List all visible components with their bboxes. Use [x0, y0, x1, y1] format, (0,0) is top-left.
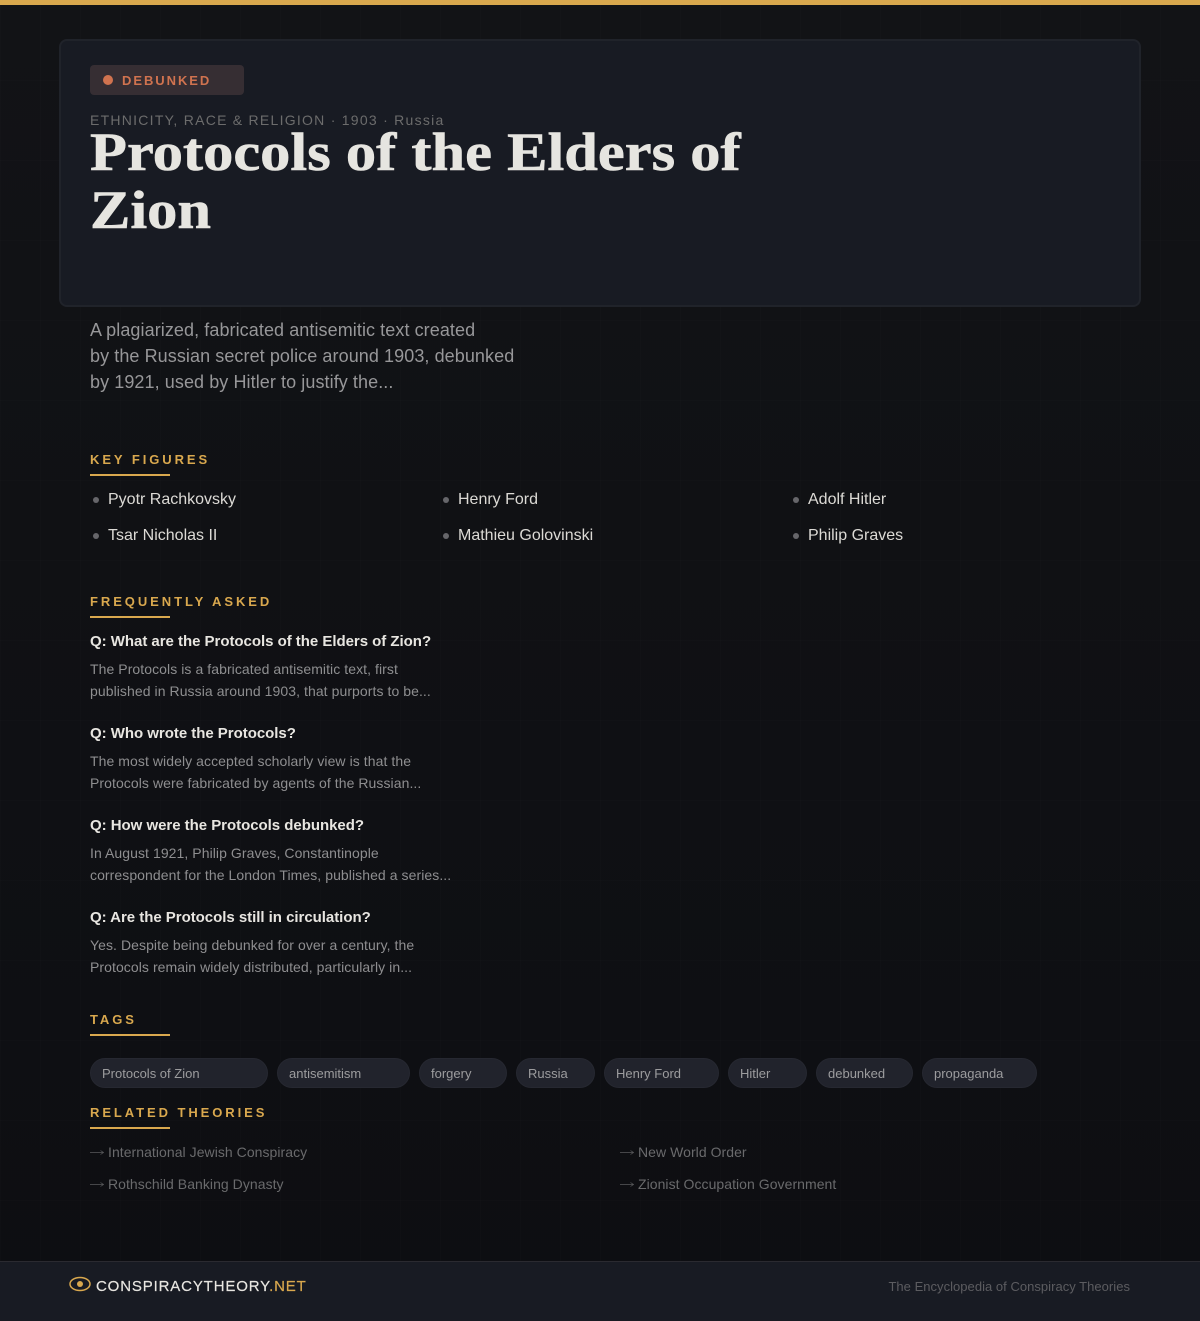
related link: New World Order: [638, 1144, 747, 1160]
figure: Adolf Hitler: [808, 491, 886, 508]
faq answer 1: [90, 661, 431, 699]
tag: debunked: [828, 1066, 885, 1081]
heading: key figures: KEY FIGURES: [90, 452, 210, 467]
tag: forgery: [431, 1066, 471, 1081]
tag: Protocols of Zion: [102, 1066, 200, 1081]
panel: key figures list: [93, 491, 903, 544]
top accent bar: [0, 0, 1200, 5]
tag: antisemitism: [289, 1066, 361, 1081]
figure: Mathieu Golovinski: [458, 527, 593, 544]
related link: Rothschild Banking Dynasty: [108, 1176, 284, 1192]
heading: tags: TAGS: [90, 1012, 137, 1027]
summary text: [90, 320, 514, 392]
faq question 4: Q: Are the Protocols still in circulation?: [90, 909, 371, 926]
title: Protocols of the Elders of: [90, 122, 741, 182]
summary text: A plagiarized, fabricated antisemitic text created: [90, 320, 475, 340]
faq answer 4: Protocols remain widely distributed, particularly in...: [90, 959, 412, 975]
panel: header card: [59, 39, 1141, 307]
faq answer 4: Yes. Despite being debunked for over a century, the: [90, 937, 414, 953]
badge label: DEBUNKED: [122, 73, 211, 88]
faq answer 2: The most widely accepted scholarly view is that the: [90, 753, 411, 769]
faq answer 2: Protocols were fabricated by agents of the Russian...: [90, 775, 421, 791]
title: Zion: [90, 180, 211, 240]
related link: Zionist Occupation Government: [638, 1176, 836, 1192]
tag: Hitler: [740, 1066, 770, 1081]
faq answer 3: In August 1921, Philip Graves, Constantinople: [90, 845, 379, 861]
tag: [728, 1058, 807, 1088]
faq answer 2: [90, 753, 421, 791]
tag: [516, 1058, 595, 1088]
footer bar: [0, 1261, 1200, 1321]
figure: Henry Ford: [458, 491, 538, 508]
logo wordmark: CONSPIRACYTHEORY.NET: [96, 1278, 307, 1295]
tag: [277, 1058, 410, 1088]
faq answer 4: [90, 937, 414, 975]
faq answer 1: The Protocols is a fabricated antisemitic text, first: [90, 661, 398, 677]
heading: frequently asked: FREQUENTLY ASKED: [90, 594, 272, 609]
faq question 2: Q: Who wrote the Protocols?: [90, 725, 296, 742]
tag: [90, 1058, 268, 1088]
footer tagline: The Encyclopedia of Conspiracy Theories: [888, 1279, 1130, 1294]
figure: Philip Graves: [808, 527, 903, 544]
badge dot: [103, 75, 113, 85]
faq question 1: Q: What are the Protocols of the Elders of Zion?: [90, 633, 431, 650]
faq answer 3: correspondent for the London Times, published a series...: [90, 867, 451, 883]
faq answer 3: [90, 845, 451, 883]
status badge: [90, 65, 244, 95]
faq question 3: Q: How were the Protocols debunked?: [90, 817, 364, 834]
tags row: [90, 1058, 1037, 1088]
category line: ETHNICITY, RACE & RELIGION · 1903 · Russia: [90, 112, 445, 128]
tag: Henry Ford: [616, 1066, 681, 1081]
tag: [922, 1058, 1037, 1088]
icon: eye logo: [69, 1276, 91, 1292]
summary text: by 1921, used by Hitler to justify the...: [90, 372, 393, 392]
tag: Russia: [528, 1066, 568, 1081]
figure: Pyotr Rachkovsky: [108, 491, 236, 508]
faq answer 1: published in Russia around 1903, that purports to be...: [90, 683, 431, 699]
related link: International Jewish Conspiracy: [108, 1144, 307, 1160]
summary text: by the Russian secret police around 1903, debunked: [90, 346, 514, 366]
figure: Tsar Nicholas II: [108, 527, 217, 544]
title: [90, 122, 742, 240]
tag: [604, 1058, 719, 1088]
tag: propaganda: [934, 1066, 1003, 1081]
tag: [419, 1058, 507, 1088]
heading: related theories: RELATED THEORIES: [90, 1105, 267, 1120]
tag: [816, 1058, 913, 1088]
